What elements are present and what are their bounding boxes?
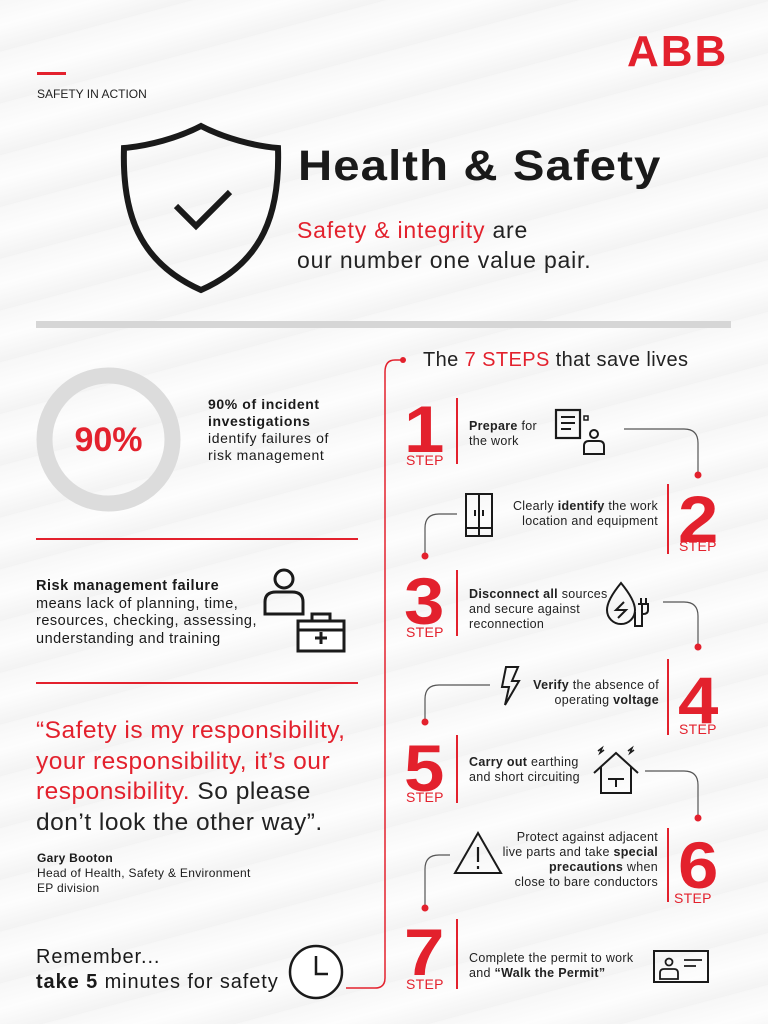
remember text: Remember... bbox=[36, 946, 160, 968]
stat text: risk management bbox=[208, 447, 324, 463]
quote attribution: Gary Booton bbox=[37, 851, 113, 865]
subtitle: our number one value pair. bbox=[297, 247, 591, 273]
step 6: Protect against adjacent bbox=[517, 830, 658, 844]
icon: clock bbox=[288, 944, 344, 1000]
icon: house earthing bbox=[593, 746, 639, 794]
step 3 bbox=[404, 564, 649, 640]
icon: person and toolbox bbox=[264, 568, 346, 652]
step 3: Disconnect all sources bbox=[469, 587, 608, 601]
step 2: Clearly identify the work location and equipment bbox=[513, 499, 658, 528]
stat text bbox=[208, 396, 329, 463]
remember text: take 5 minutes for safety bbox=[36, 971, 279, 993]
stat text: identify failures of bbox=[208, 430, 329, 446]
subtitle bbox=[297, 217, 591, 273]
label: safety in action: SAFETY IN ACTION bbox=[37, 87, 147, 101]
icon: permit card bbox=[653, 950, 709, 983]
step 6: close to bare conductors bbox=[515, 875, 658, 889]
step 1: the work bbox=[469, 434, 519, 448]
icon: cabinet bbox=[465, 493, 493, 537]
step 7: and “Walk the Permit” bbox=[469, 966, 605, 980]
step 4: STEP bbox=[679, 721, 717, 737]
quote attribution: EP division bbox=[37, 881, 99, 895]
red divider bbox=[36, 538, 358, 540]
title: Health & Safety bbox=[298, 142, 661, 190]
icon: drop with plug bbox=[606, 582, 649, 627]
icon: shield bbox=[120, 122, 282, 294]
step 3: 3 bbox=[404, 564, 444, 638]
step 7 bbox=[404, 915, 709, 992]
step 3: STEP bbox=[406, 624, 444, 640]
donut chart 90% bbox=[36, 368, 180, 512]
step 4: 4 bbox=[678, 663, 718, 737]
heading: 7 steps: The 7 STEPS that save lives bbox=[423, 349, 688, 371]
quote: don’t look the other way”. bbox=[36, 808, 323, 836]
risk management text: understanding and training bbox=[36, 630, 221, 646]
step 7: 7 bbox=[404, 915, 444, 989]
step 6: STEP bbox=[674, 890, 712, 906]
donut chart 90%: 90% bbox=[74, 421, 143, 459]
quote: “Safety is my responsibility, bbox=[36, 717, 346, 744]
risk management text: resources, checking, assessing, bbox=[36, 613, 257, 629]
step 2 bbox=[465, 482, 718, 556]
stat text: 90% of incident bbox=[208, 396, 320, 412]
step 1 bbox=[404, 392, 605, 468]
icon: document and person bbox=[554, 408, 605, 455]
step 3: and secure against bbox=[469, 602, 580, 616]
step 7: Complete the permit to work bbox=[469, 951, 633, 965]
step 4: Verify the absence of operating voltage bbox=[533, 678, 659, 707]
step 6: live parts and take special bbox=[503, 845, 658, 859]
icon: warning bbox=[453, 831, 503, 874]
step 7: STEP bbox=[406, 976, 444, 992]
quote bbox=[36, 717, 346, 836]
gray divider bar bbox=[36, 321, 731, 328]
step 5: 5 bbox=[404, 731, 444, 805]
step 5: STEP bbox=[406, 789, 444, 805]
step 1: Prepare for bbox=[469, 419, 537, 433]
subtitle: Safety & integrity are bbox=[297, 217, 528, 243]
icon: lightning bbox=[500, 666, 521, 706]
risk management text bbox=[36, 578, 257, 646]
quote attribution: Head of Health, Safety & Environment bbox=[37, 866, 251, 880]
ABB logo: ABB bbox=[627, 27, 728, 76]
step 6 bbox=[453, 828, 718, 906]
remember text bbox=[36, 946, 279, 993]
red divider bbox=[36, 682, 358, 684]
quote: responsibility. So please bbox=[36, 778, 311, 805]
step 5: Carry out earthing bbox=[469, 755, 579, 769]
step 2: 2 bbox=[678, 482, 718, 556]
quote attribution bbox=[37, 851, 251, 895]
stat text: investigations bbox=[208, 413, 311, 429]
red timeline line bbox=[346, 357, 406, 989]
step 5 bbox=[404, 731, 639, 805]
red accent dash bbox=[37, 72, 66, 75]
step 2: STEP bbox=[679, 538, 717, 554]
risk management text: Risk management failure bbox=[36, 578, 219, 594]
quote: your responsibility, it’s our bbox=[36, 748, 330, 774]
step 1: 1 bbox=[404, 392, 444, 466]
step 6: precautions when bbox=[549, 860, 658, 874]
step 6: 6 bbox=[678, 828, 718, 902]
step 4 bbox=[500, 659, 718, 737]
step 5: and short circuiting bbox=[469, 770, 580, 784]
step 3: reconnection bbox=[469, 617, 544, 631]
risk management text: means lack of planning, time, bbox=[36, 596, 238, 612]
step 1: STEP bbox=[406, 452, 444, 468]
